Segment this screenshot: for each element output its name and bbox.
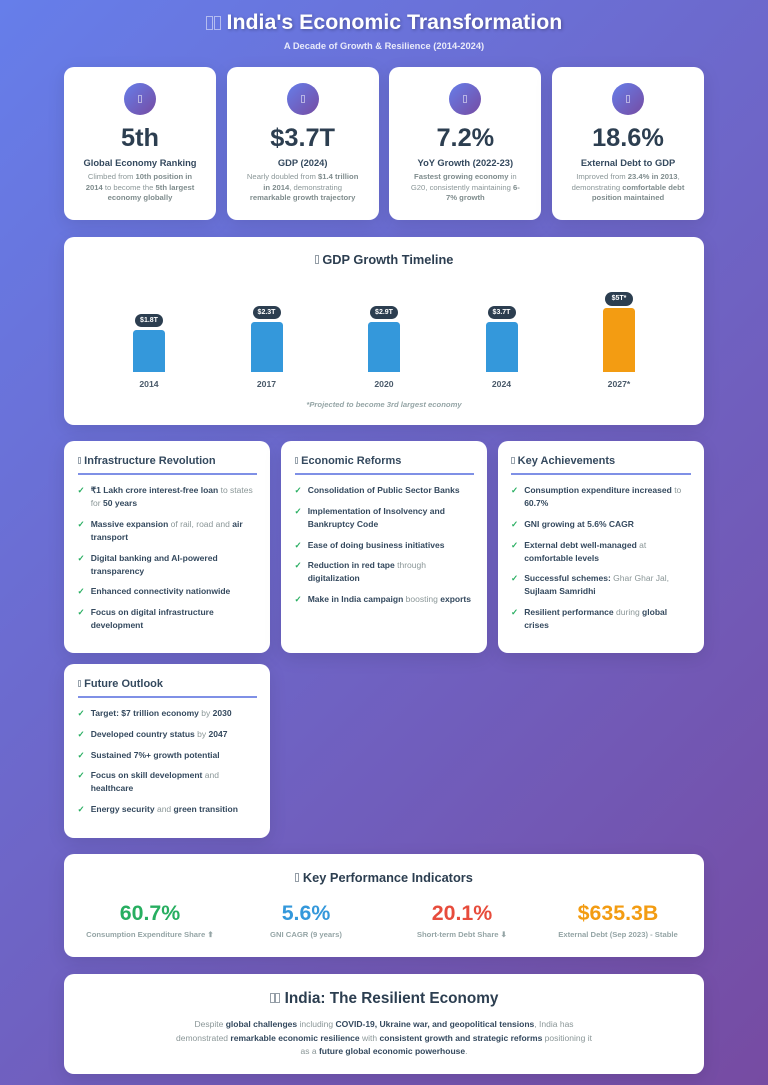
bullet list: ✓ xyxy=(78,770,85,780)
bullet list: External debt well-managed at comfortable levels xyxy=(524,540,646,563)
stat value: $3.7T xyxy=(270,124,335,152)
bar 2020 xyxy=(368,322,400,372)
bullet list: Make in India campaign boosting exports xyxy=(308,594,471,604)
panel heading xyxy=(294,454,474,474)
bullet list: Target: $7 trillion economy by 2030 xyxy=(91,708,232,718)
stat description: Fastest growing economy in G20, consistently maintaining 6-7% growth xyxy=(411,172,520,202)
value label 2020 xyxy=(370,306,398,319)
bullet list: Digital banking and AI-powered transparency xyxy=(91,553,218,576)
value label 2024: $3.7T xyxy=(493,308,510,316)
conclusion text: Despite global challenges including COVID-19, Ukraine war, and geopolitical tensions, India has demonstrated remarkable economic resilience with consistent growth and strategic reforms positioning it as a future global economic powerhouse. xyxy=(176,1019,592,1056)
bullet list: ✓ xyxy=(78,804,85,814)
value label 2017 xyxy=(252,306,280,319)
stat description: Climbed from 10th position in 2014 to become the 5th largest economy globally xyxy=(86,172,194,202)
bullet list: ✓ xyxy=(78,586,85,596)
panel: future outlook xyxy=(64,664,270,838)
panel: global economy ranking xyxy=(64,67,216,220)
panel heading xyxy=(511,454,690,474)
chart heading: GDP Growth Timeline xyxy=(322,252,453,266)
value label 2027 xyxy=(605,292,633,306)
icon: missing glyph badge xyxy=(449,83,481,115)
value label 2020: $2.9T xyxy=(375,308,393,316)
bullet list: Developed country status by 2047 xyxy=(91,729,227,739)
bar 2014 xyxy=(133,330,165,372)
panel heading: Infrastructure Revolution xyxy=(84,454,216,466)
bullet list: ✓ xyxy=(294,506,302,516)
conclusion heading: India: The Resilient Economy xyxy=(285,990,498,1006)
stat label: External Debt to GDP xyxy=(581,158,675,168)
stat value: 18.6% xyxy=(592,124,664,152)
panel: GDP xyxy=(227,67,379,220)
KPI label: external debt: External Debt (Sep 2023) - Stable xyxy=(558,930,678,939)
subtitle: A Decade of Growth & Resilience (2014-2024) xyxy=(284,40,484,50)
bullet list xyxy=(511,485,681,630)
bullet list: ✓ xyxy=(78,553,85,563)
bullet list: ✓ xyxy=(511,540,518,550)
bullet list: ✓ xyxy=(294,540,302,550)
bullet list: Energy security and green transition xyxy=(91,804,238,814)
value label 2027: $5T* xyxy=(612,295,626,302)
year label 2017: 2017 xyxy=(257,379,276,389)
stat label: Global Economy Ranking xyxy=(84,158,196,168)
bullet list xyxy=(294,485,471,604)
bullet list: ✓ xyxy=(511,573,518,583)
stat description: Improved from 23.4% in 2013, demonstrating comfortable debt position maintained xyxy=(572,172,684,202)
bullet list: ✓ xyxy=(294,594,302,604)
bullet list: Focus on digital infrastructure development xyxy=(91,607,214,630)
bullet list xyxy=(78,485,253,630)
bullet list: ✓ xyxy=(78,485,85,495)
bullet list: GNI growing at 5.6% CAGR xyxy=(524,519,634,529)
panel: GDP growth timeline xyxy=(64,237,704,425)
KPI heading: Key Performance Indicators xyxy=(303,870,473,884)
value label 2017: $2.3T xyxy=(258,308,275,316)
bullet list: ✓ xyxy=(511,485,518,495)
panel heading xyxy=(78,676,257,698)
panel: YoY growth xyxy=(389,67,541,220)
panel heading: Key Achievements xyxy=(518,454,615,466)
stat label: YoY Growth (2022-23) xyxy=(418,158,513,168)
bullet list: Successful schemes: Ghar Ghar Jal, Sujlaam Samridhi xyxy=(524,573,669,596)
bullet list: ✓ xyxy=(294,485,302,495)
icon: missing glyph badge xyxy=(612,83,644,115)
bullet list: Sustained 7%+ growth potential xyxy=(91,750,220,760)
chart footnote: *Projected to become 3rd largest economy xyxy=(306,400,462,409)
bar 2024 xyxy=(486,322,518,372)
panel: infrastructure revolution xyxy=(64,441,270,653)
stat description: Nearly doubled from $1.4 trillion in 2014, demonstrating remarkable growth trajectory xyxy=(247,172,358,202)
bullet list: Resilient performance during global crises xyxy=(524,607,667,630)
year label 2014: 2014 xyxy=(139,379,159,389)
KPI label: short-term debt: Short-term Debt Share ⬇ xyxy=(417,930,507,939)
panel: external debt xyxy=(552,67,704,220)
bullet list: ✓ xyxy=(78,750,85,760)
icon: missing glyph badge xyxy=(124,83,156,115)
bullet list: ✓ xyxy=(78,519,85,529)
bullet list: ✓ xyxy=(78,607,85,617)
stat value: 5th xyxy=(121,124,159,152)
bullet list: Implementation of Insolvency and Bankruptcy Code xyxy=(308,506,445,529)
bullet list: ₹1 Lakh crore interest-free loan to states for 50 years xyxy=(91,485,253,508)
panel heading xyxy=(78,454,257,474)
bullet list: Consolidation of Public Sector Banks xyxy=(308,485,460,495)
KPI label: GNI: GNI CAGR (9 years) xyxy=(270,930,342,939)
value label 2014: $1.8T xyxy=(140,316,158,324)
bullet list: Enhanced connectivity nationwide xyxy=(91,586,230,596)
year label 2024: 2024 xyxy=(492,379,511,389)
KPI value: short-term debt: 20.1% xyxy=(432,900,492,924)
bullet list: ✓ xyxy=(294,560,302,570)
bar 2017 xyxy=(250,322,282,372)
panel: conclusion xyxy=(64,974,704,1074)
panel: economic reforms xyxy=(281,441,487,653)
panel heading: Future Outlook xyxy=(84,678,163,690)
bullet list: Reduction in red tape through digitalization xyxy=(308,560,426,583)
stat label: GDP (2024) xyxy=(278,158,327,168)
KPI value: external debt: $635.3B xyxy=(578,900,658,924)
KPI value: consumption: 60.7% xyxy=(120,900,180,924)
bullet list: ✓ xyxy=(511,607,518,617)
panel heading: Economic Reforms xyxy=(301,454,401,466)
title: India's Economic Transformation xyxy=(227,10,562,34)
panel: key achievements xyxy=(498,441,704,653)
stat value: 7.2% xyxy=(436,124,494,152)
KPI label: consumption: Consumption Expenditure Share ⬆ xyxy=(86,930,214,939)
bar 2027 projected xyxy=(602,308,634,372)
year label 2027: 2027* xyxy=(608,379,630,389)
KPI value: GNI: 5.6% xyxy=(282,900,330,924)
bullet list: ✓ xyxy=(78,708,85,718)
bullet list xyxy=(78,708,238,814)
bullet list: ✓ xyxy=(78,729,85,739)
bullet list: Focus on skill development and healthcare xyxy=(91,770,219,793)
bullet list: Ease of doing business initiatives xyxy=(308,540,444,550)
bullet list: ✓ xyxy=(511,519,518,529)
icon: missing glyph badge xyxy=(287,83,319,115)
bar chart xyxy=(133,292,636,372)
value label 2024 xyxy=(488,306,516,319)
panel: key performance indicators xyxy=(64,854,704,957)
bullet list: Consumption expenditure increased to 60.7% xyxy=(524,485,681,508)
year label 2020: 2020 xyxy=(374,379,394,389)
value label 2014 xyxy=(135,314,163,327)
bullet list: Massive expansion of rail, road and air transport xyxy=(91,519,243,542)
